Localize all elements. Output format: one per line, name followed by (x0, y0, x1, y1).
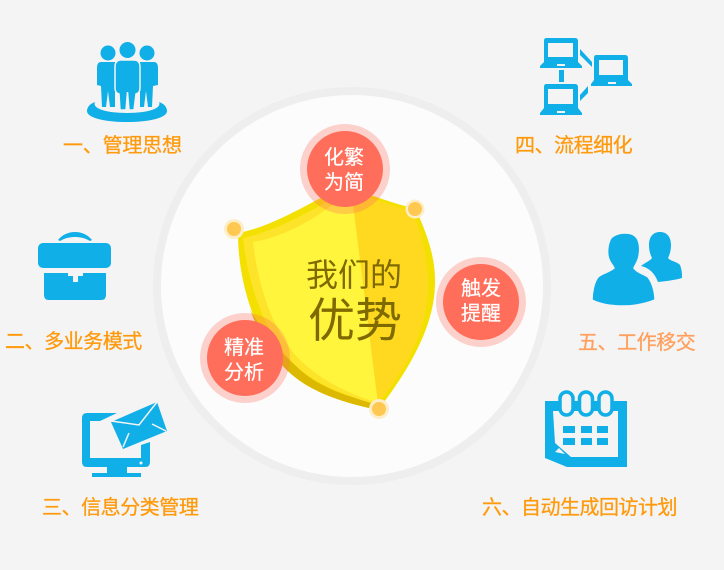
label: 六、自动生成回访计划: 六、自动生成回访计划 (482, 496, 677, 519)
badge: 触发提醒 (436, 257, 526, 347)
label: 一、管理思想: 一、管理思想 (63, 134, 182, 157)
badge: 精准分析: 精准 (224, 336, 264, 359)
shield corner dot: top left (224, 219, 244, 239)
shield (238, 187, 435, 410)
icon: networked laptops (540, 38, 632, 115)
shield title: 我们的 (306, 257, 402, 293)
icon: calendar (545, 392, 627, 467)
label: 三、信息分类管理: 三、信息分类管理 (42, 496, 199, 519)
badge: 化繁为简 (300, 124, 390, 214)
label: 五、工作移交: 五、工作移交 (578, 331, 696, 354)
badge: 触发提醒: 触发 (461, 277, 501, 300)
badge: 化繁为简: 为简 (324, 171, 364, 194)
icon: briefcase (38, 232, 111, 300)
central circle (157, 91, 547, 481)
shield title: 优势 (308, 294, 402, 347)
icon: team (87, 42, 167, 122)
badge: 触发提醒: 提醒 (461, 302, 501, 325)
shield title (306, 257, 402, 347)
label: 四、流程细化: 四、流程细化 (515, 134, 633, 157)
badge: 化繁为简: 化繁 (324, 146, 364, 169)
badge: 精准分析 (200, 313, 290, 403)
shield corner dot: top right (406, 200, 424, 218)
icon: monitor with envelope (82, 402, 167, 477)
label: 二、多业务模式: 二、多业务模式 (5, 330, 142, 353)
badge: 精准分析: 分析 (224, 361, 264, 384)
shield corner dot: bottom (369, 399, 389, 419)
icon: two users (592, 232, 682, 306)
